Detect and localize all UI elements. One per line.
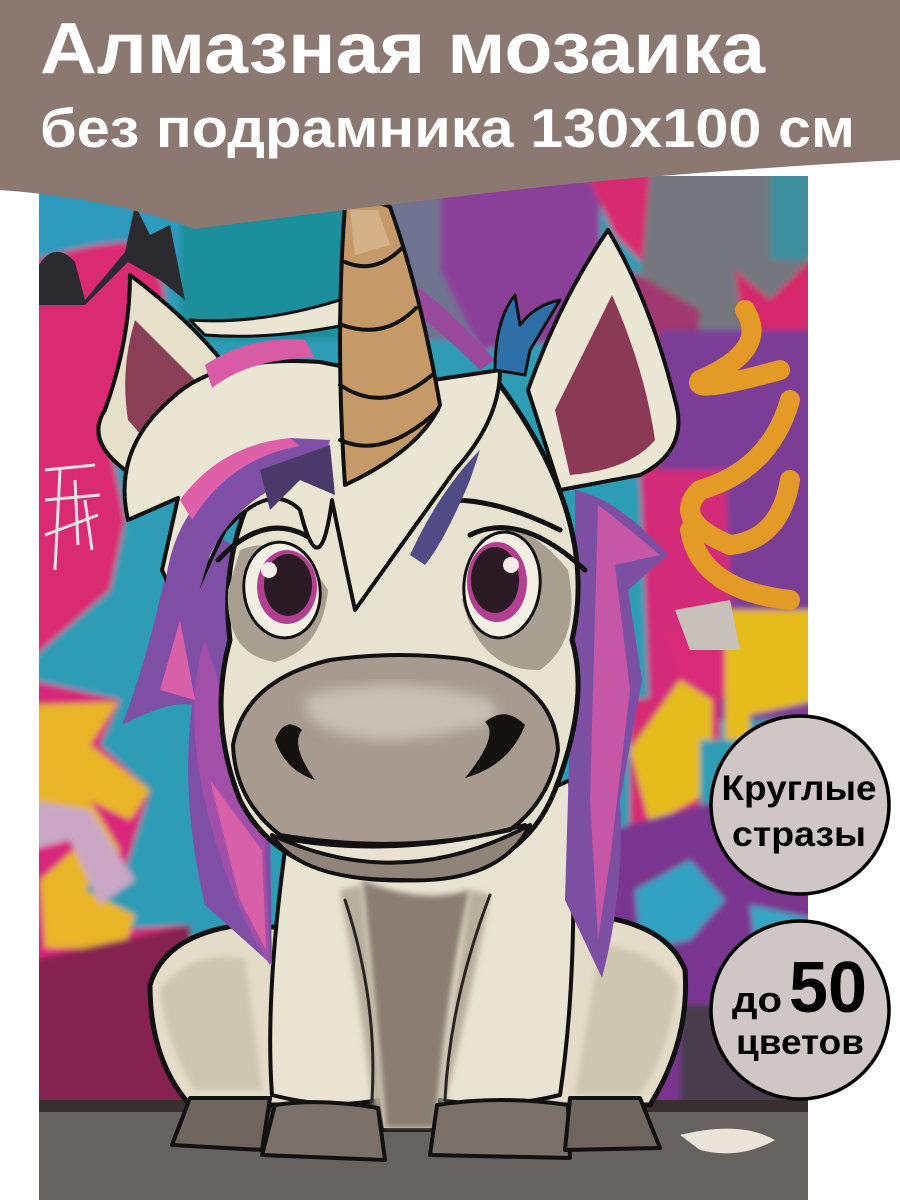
header banner [0, 0, 900, 229]
badge: round rhinestones [711, 716, 889, 894]
head [221, 385, 578, 880]
left pink heart [30, 242, 165, 660]
muzzle [233, 655, 558, 844]
blue tuft [495, 295, 560, 375]
right ear [528, 230, 678, 490]
picture: unicorn on graffiti wall [30, 170, 820, 1200]
badge: up to 50 colours: до [732, 979, 782, 1020]
orange graffiti strokes [690, 310, 790, 600]
graffiti background [30, 170, 820, 1200]
left eye [218, 528, 326, 643]
horn [340, 203, 440, 485]
right wall colours [660, 330, 820, 720]
black drips on wall [39, 205, 185, 305]
left ear [96, 273, 220, 472]
mane right [565, 490, 668, 978]
hooves [172, 1098, 270, 1150]
ground [39, 1105, 808, 1200]
forelock [125, 285, 500, 640]
badge: round rhinestones: Круглые [722, 769, 876, 808]
mouth [272, 825, 530, 880]
badge: up to 50 colours: цветов [736, 1023, 864, 1062]
title: без подрамника 130х100 см [40, 97, 855, 159]
unicorn [98, 203, 686, 1160]
eye sockets [228, 545, 328, 662]
badge: up to 50 colours [711, 921, 889, 1099]
haunches [148, 924, 292, 1108]
title [40, 9, 855, 159]
white tag [45, 465, 100, 570]
badge: round rhinestones: стразы [732, 815, 866, 854]
badge: up to 50 colours: 50 [789, 948, 867, 1028]
right eye [452, 500, 585, 642]
chest and legs [270, 780, 573, 1130]
title: Алмазная мозаика [40, 9, 766, 89]
nostrils [275, 724, 315, 780]
leg outlines [345, 895, 490, 1100]
lower left wall [39, 676, 190, 963]
mane left [122, 510, 272, 965]
